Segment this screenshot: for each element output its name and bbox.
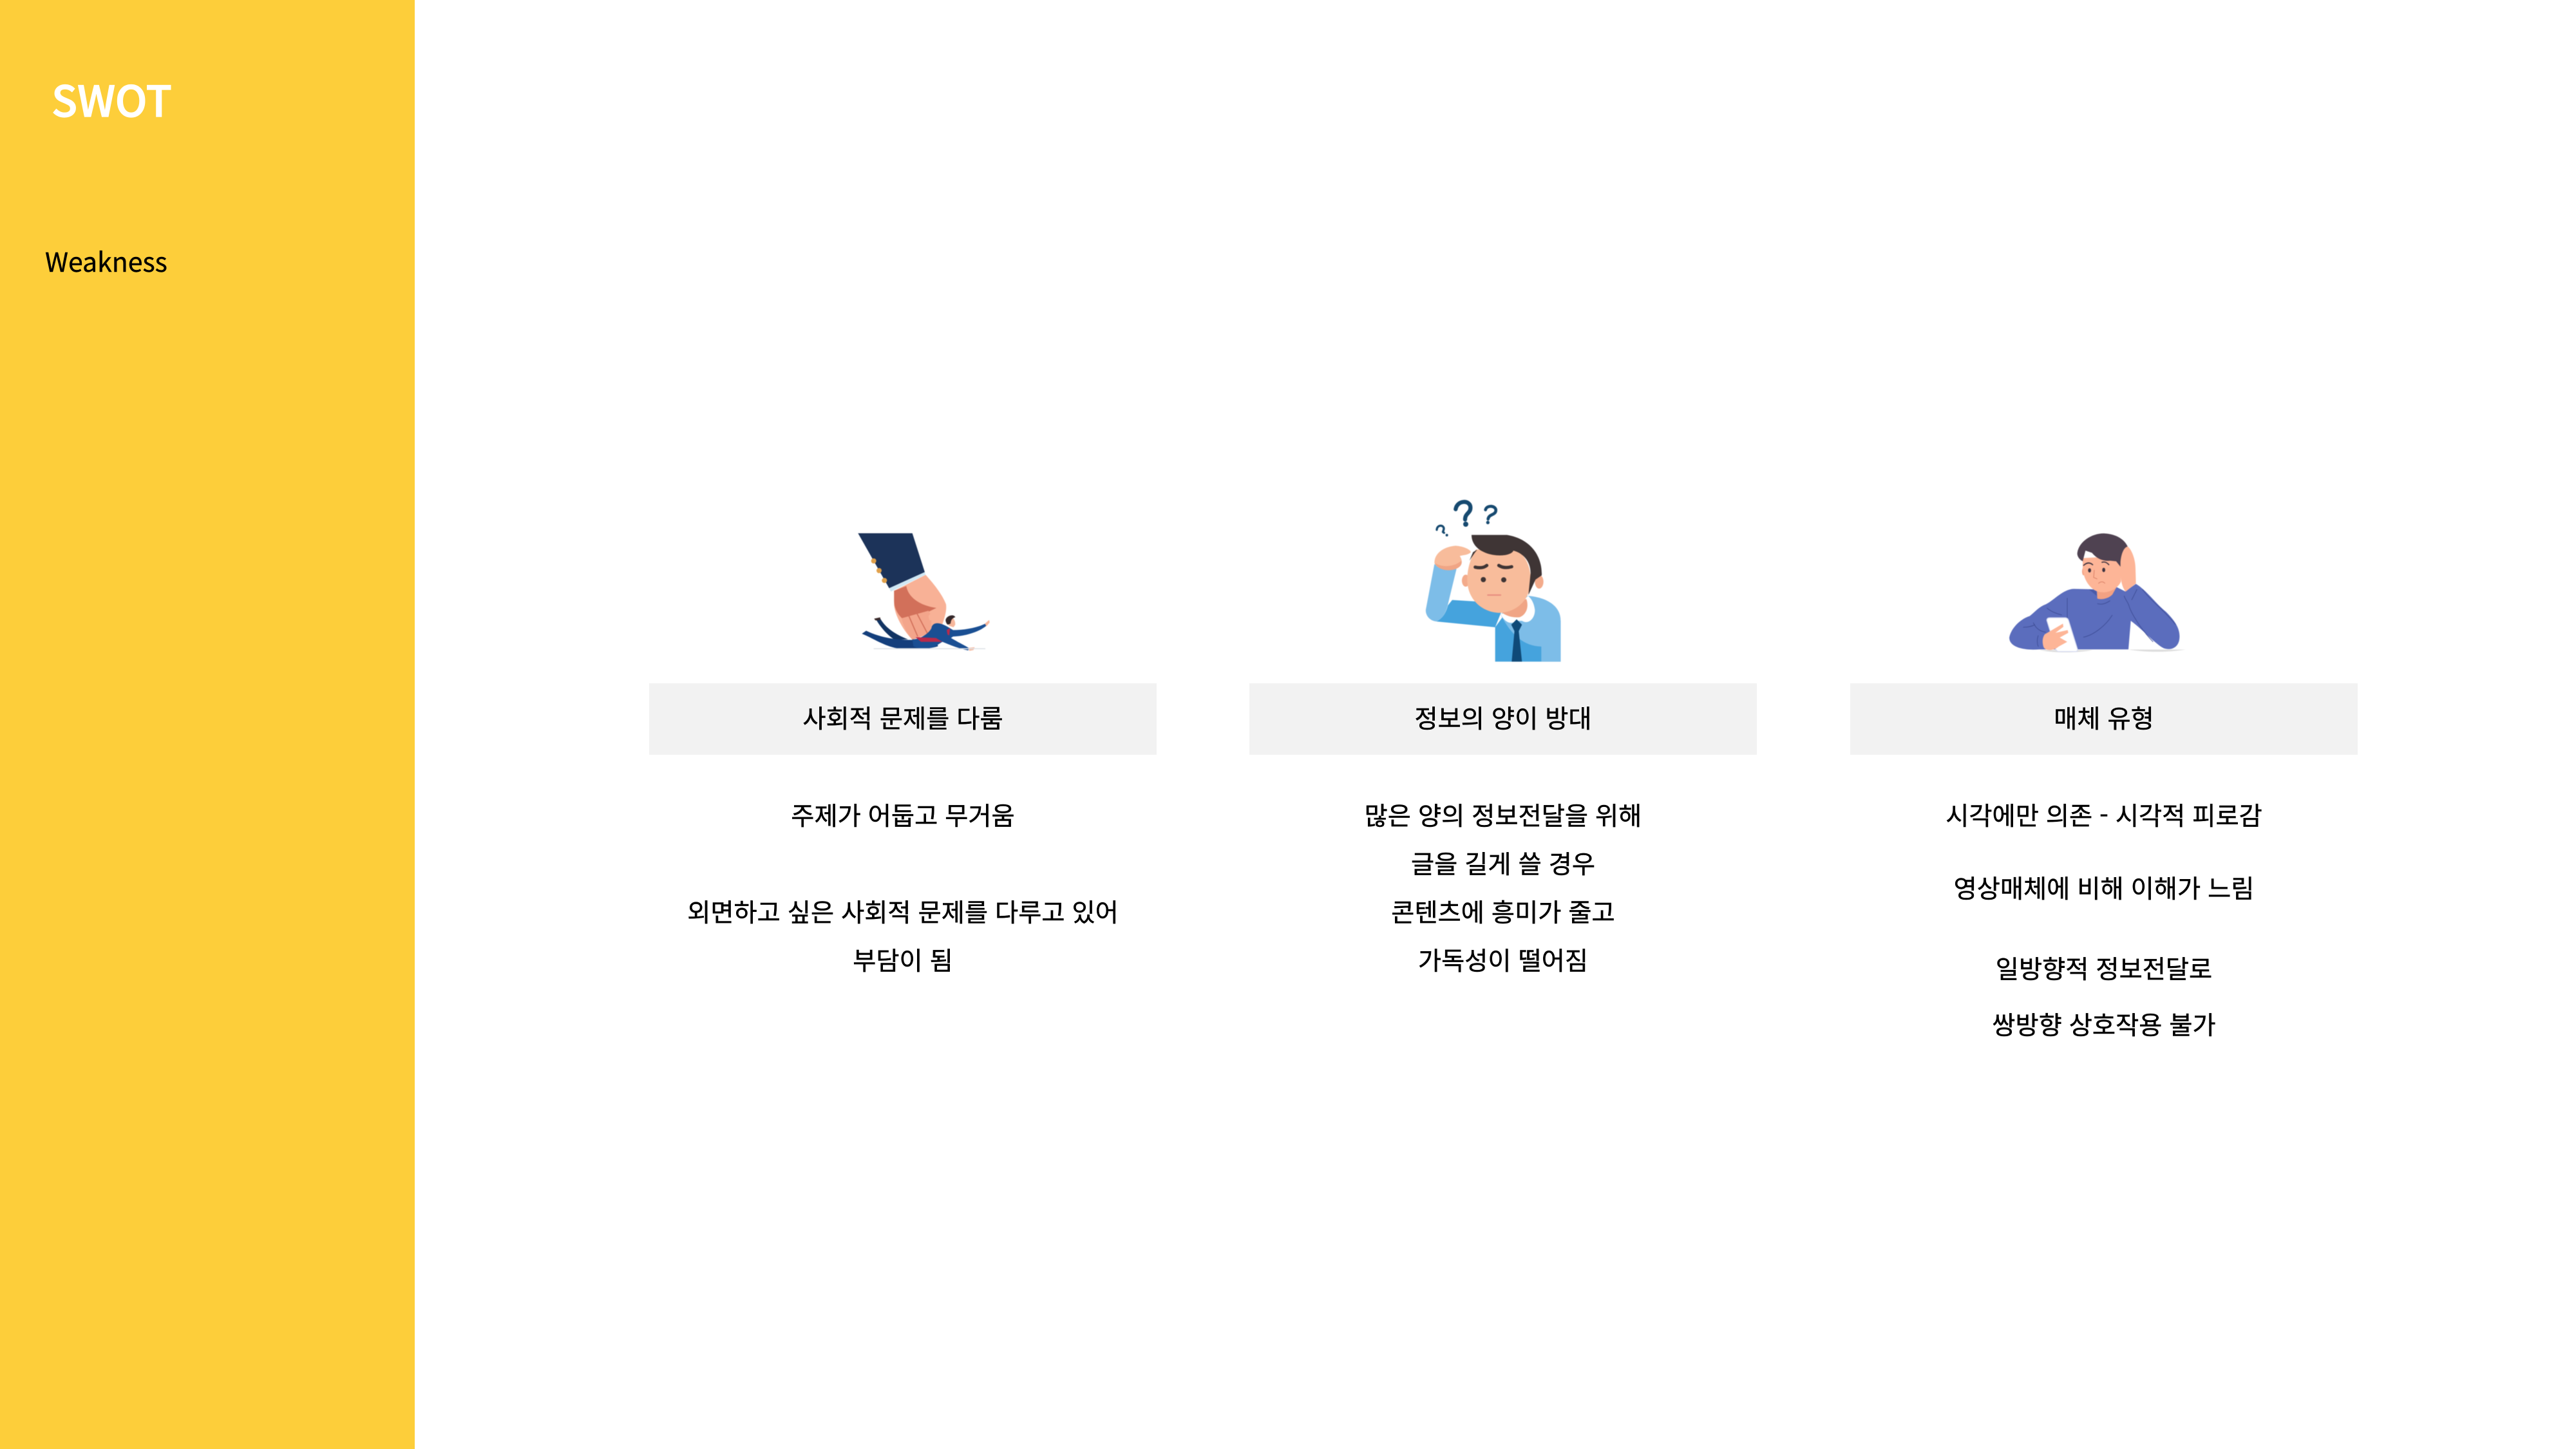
- icon: tired man looking at phone: [2009, 533, 2184, 653]
- icon: giant fist pressing businessman: [858, 533, 990, 651]
- text block: long text reduces readability: 콘텐츠에 흥미가 줄고: [1391, 893, 1615, 929]
- panel: information volume column: [1249, 499, 1757, 978]
- panel: media type column: [1850, 533, 2358, 1042]
- text block: long text reduces readability: 가독성이 떨어짐: [1418, 941, 1588, 978]
- text block: burden: 부담이 됨: [853, 941, 953, 978]
- text block: slower understanding: 영상매체에 비해 이해가 느림: [1954, 869, 2254, 905]
- text block: long text reduces readability: 글을 길게 쓸 경우: [1411, 844, 1595, 881]
- icon: confused man with question marks: [1425, 499, 1561, 662]
- text block: burden: 외면하고 싶은 사회적 문제를 다루고 있어: [687, 893, 1119, 929]
- text block: visual fatigue: 시각에만 의존 - 시각적 피로감: [1946, 796, 2262, 833]
- heading: social issues: [649, 683, 1157, 755]
- heading: media type: [1850, 683, 2358, 755]
- title: SWOT: SWOT: [52, 68, 172, 129]
- sidebar panel: [0, 0, 415, 1449]
- heading: social issues: 사회적 문제를 다룸: [802, 699, 1003, 735]
- text block: long text reduces readability: 많은 양의 정보전달을 위해: [1365, 796, 1642, 833]
- heading: information volume: [1249, 683, 1757, 755]
- subtitle: Weakness: Weakness: [45, 241, 167, 279]
- text block: heavy topics: 주제가 어둡고 무거움: [791, 796, 1015, 833]
- heading: information volume: 정보의 양이 방대: [1414, 699, 1592, 735]
- panel: social issues column: [649, 533, 1157, 978]
- text block: no interaction: 쌍방향 상호작용 불가: [1992, 1005, 2216, 1042]
- text block: one-way communication: 일방향적 정보전달로: [1996, 949, 2212, 986]
- text block: long text reduces readability: [1365, 796, 1642, 978]
- text block: burden: [687, 893, 1119, 978]
- heading: media type: 매체 유형: [2054, 699, 2154, 735]
